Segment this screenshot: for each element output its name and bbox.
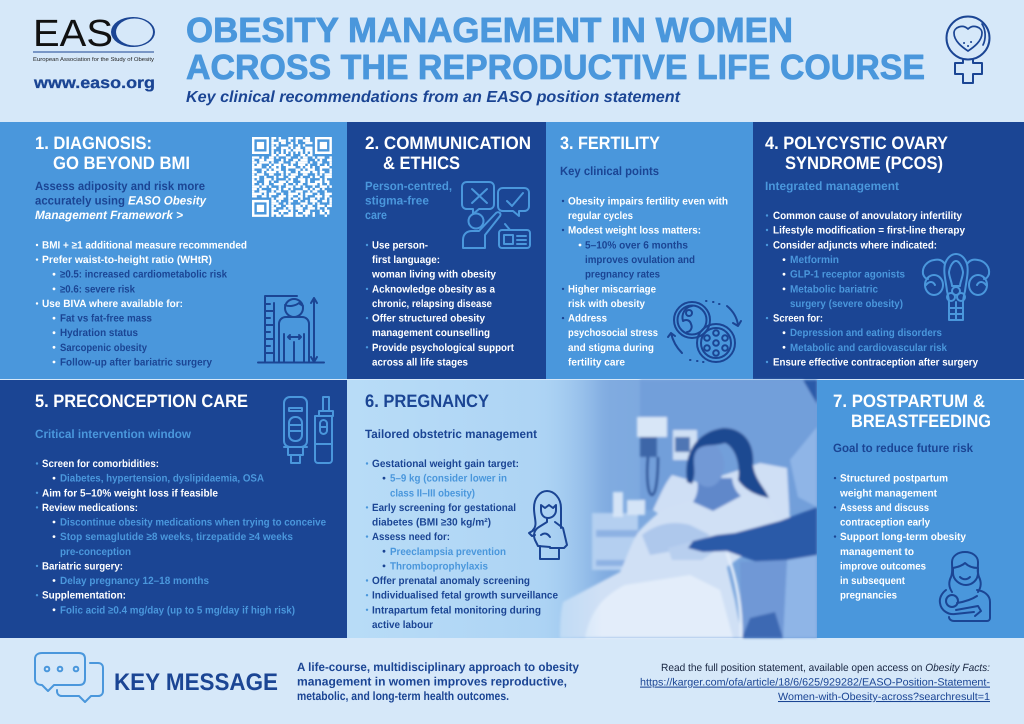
heading: 5. PRECONCEPTION CARE — [35, 391, 248, 411]
reference link: Women-with-Obesity-across?searchresult=1 — [778, 691, 990, 703]
list — [366, 240, 514, 368]
reference link: https://karger.com/ofa/article/18/6/625/929282/EASO-Position-Statement- — [640, 677, 991, 689]
list: Sarcopenic obesity — [60, 342, 147, 354]
list: woman living with obesity — [371, 269, 496, 281]
list: Fat vs fat-free mass — [60, 312, 152, 324]
icon: pregnant woman — [529, 491, 567, 559]
list: Thromboprophylaxis — [390, 560, 488, 572]
EASO logo — [33, 13, 155, 63]
icon: speech bubbles with person — [462, 182, 530, 248]
intro text: Integrated management — [765, 179, 899, 193]
intro text: Goal to reduce future risk — [833, 441, 973, 455]
panel 5: preconception care — [0, 380, 347, 638]
intro text: Key clinical points — [560, 164, 659, 178]
list: weight management — [839, 487, 937, 499]
list: Review medications: — [42, 502, 138, 514]
panel 4: PCOS — [753, 122, 1024, 379]
reference link: Read the full position statement, available open access on Obesity Facts: — [661, 662, 990, 674]
heading: 7. POSTPARTUM & — [833, 391, 985, 411]
list: BMI + ≥1 additional measure recommended — [42, 240, 247, 252]
list: class II–III obesity) — [390, 487, 475, 499]
panel 7: postpartum and breastfeeding — [817, 380, 1024, 638]
list — [766, 210, 978, 368]
title — [186, 11, 925, 87]
heading — [35, 133, 190, 173]
list: management counselling — [372, 327, 490, 339]
QR code — [252, 138, 332, 216]
subtitle: Key clinical recommendations from an EASO position statement — [186, 89, 681, 106]
list: Assess and discuss — [840, 502, 929, 514]
heading — [365, 133, 531, 173]
intro text: Critical intervention window — [35, 427, 192, 441]
heading — [765, 133, 948, 173]
EASO logo: EAS — [33, 13, 113, 55]
list: Metabolic and cardiovascular risk — [790, 342, 947, 354]
list: Preeclampsia prevention — [390, 546, 506, 558]
list: GLP-1 receptor agonists — [790, 269, 905, 281]
list: Diabetes, hypertension, dyslipidaemia, OSA — [60, 473, 264, 485]
intro text: Management Framework > — [35, 208, 183, 222]
heading: 3. FERTILITY — [560, 133, 660, 153]
list: active labour — [372, 619, 433, 631]
list: Delay pregnancy 12–18 months — [60, 575, 209, 587]
title: OBESITY MANAGEMENT IN WOMEN — [186, 11, 793, 50]
list: Screen for: — [773, 312, 823, 324]
list — [834, 473, 966, 602]
list: management to — [840, 546, 914, 558]
list: Depression and eating disorders — [790, 327, 942, 339]
list: Hydration status — [60, 327, 138, 339]
list: Metformin — [790, 254, 839, 266]
list: 5–10% over 6 months — [585, 240, 688, 252]
list: Prefer waist-to-height ratio (WHtR) — [42, 254, 212, 266]
intro text: Assess adiposity and risk more — [35, 179, 205, 193]
intro text — [365, 179, 452, 222]
list: Acknowledge obesity as a — [372, 283, 495, 295]
list: risk with obesity — [568, 298, 645, 310]
icon: person with height ruler — [258, 296, 324, 362]
key message label: KEY MESSAGE — [114, 669, 278, 696]
list: regular cycles — [568, 210, 633, 222]
list: Lifestyle modification = first-line therapy — [773, 224, 965, 236]
icon: mother holding baby — [940, 552, 990, 621]
list — [36, 458, 326, 616]
list: and stigma during — [568, 342, 654, 354]
list: ≥0.5: increased cardiometabolic risk — [60, 269, 227, 281]
list: in subsequent — [840, 575, 905, 587]
heading: 1. DIAGNOSIS: — [35, 133, 152, 153]
heading: GO BEYOND BMI — [53, 153, 190, 173]
list: across all life stages — [372, 356, 468, 368]
reference link — [640, 662, 991, 703]
list: Ensure effective contraception after surgery — [773, 356, 978, 368]
EASO logo: European Association for the Study of Obesity — [33, 56, 154, 63]
photo: patient with clinician — [560, 380, 817, 638]
intro text: Person-centred, — [365, 179, 452, 193]
list: Use person- — [372, 240, 428, 252]
key message text: metabolic, and long-term health outcomes. — [297, 689, 509, 703]
list: Structured postpartum — [840, 473, 948, 485]
title: ACROSS THE REPRODUCTIVE LIFE COURSE — [186, 48, 925, 87]
icon: female symbol with heart — [946, 16, 990, 83]
heading: 4. POLYCYSTIC OVARY — [765, 133, 948, 153]
list: Support long-term obesity — [840, 531, 966, 543]
panel 6: pregnancy — [347, 380, 817, 638]
list: psychosocial stress — [568, 327, 658, 339]
header — [33, 11, 989, 106]
heading: 2. COMMUNICATION — [365, 133, 531, 153]
heading: BREASTFEEDING — [851, 411, 991, 431]
list: Common cause of anovulatory infertility — [773, 210, 962, 222]
list: improve outcomes — [840, 560, 926, 572]
list: Individualised fetal growth surveillance — [372, 590, 558, 602]
list: Obesity impairs fertility even with — [568, 196, 728, 208]
intro text: Tailored obstetric management — [365, 427, 537, 441]
list: contraception early — [840, 516, 930, 528]
website: www.easo.org — [33, 75, 155, 92]
list: first language: — [372, 254, 440, 266]
list: Gestational weight gain target: — [372, 458, 519, 470]
heading: 6. PREGNANCY — [365, 391, 489, 411]
panel 1: diagnosis — [0, 122, 347, 379]
list: fertility care — [568, 356, 625, 368]
list: Bariatric surgery: — [42, 560, 123, 572]
list: Discontinue obesity medications when trying to conceive — [60, 516, 326, 528]
list — [562, 196, 728, 368]
panel 2: communication and ethics — [347, 122, 546, 379]
intro text: accurately using — [35, 194, 125, 208]
list: pre-conception — [60, 546, 131, 558]
list: Aim for 5–10% weight loss if feasible — [42, 487, 218, 499]
list: Assess need for: — [372, 531, 450, 543]
key message text — [297, 660, 579, 703]
list: Folic acid ≥0.4 mg/day (up to 5 mg/day if high risk) — [60, 604, 295, 616]
list: Higher miscarriage — [568, 283, 656, 295]
list: Stop semaglutide ≥8 weeks, tirzepatide ≥4 weeks — [60, 531, 293, 543]
heading: & ETHICS — [383, 153, 460, 173]
list: pregnancies — [840, 590, 897, 602]
list: Intrapartum fetal monitoring during — [372, 604, 541, 616]
icon: uterus — [923, 254, 989, 320]
list: Offer prenatal anomaly screening — [372, 575, 530, 587]
list: Provide psychological support — [372, 342, 514, 354]
list: Early screening for gestational — [372, 502, 516, 514]
heading — [833, 391, 991, 431]
intro text — [35, 179, 207, 222]
footer — [35, 653, 991, 703]
intro text: care — [365, 208, 387, 222]
panel 3: fertility — [546, 122, 753, 379]
list: pregnancy rates — [585, 269, 660, 281]
list: Address — [568, 312, 607, 324]
list — [36, 240, 247, 368]
icon: chat bubbles — [35, 653, 103, 702]
intro text: stigma-free — [365, 194, 429, 208]
intro text: EASO Obesity — [128, 194, 207, 208]
list — [366, 458, 558, 631]
list: Offer structured obesity — [372, 312, 485, 324]
list: surgery (severe obesity) — [790, 298, 903, 310]
list: ≥0.6: severe risk — [60, 283, 135, 295]
list: Follow-up after bariatric surgery — [60, 356, 212, 368]
list: Screen for comorbidities: — [42, 458, 159, 470]
heading: SYNDROME (PCOS) — [785, 153, 943, 173]
list: chronic, relapsing disease — [372, 298, 492, 310]
key message text: A life-course, multidisciplinary approach to obesity — [297, 660, 579, 674]
list: 5–9 kg (consider lower in — [390, 473, 507, 485]
icon: injection pens — [284, 397, 333, 463]
list: Supplementation: — [42, 590, 126, 602]
list: Use BIVA where available for: — [42, 298, 183, 310]
list: Metabolic bariatric — [790, 283, 878, 295]
key message text: management in women improves reproductive, — [297, 675, 567, 689]
list: improves ovulation and — [585, 254, 695, 266]
list: Consider adjuncts where indicated: — [773, 240, 937, 252]
list: Modest weight loss matters: — [568, 224, 701, 236]
icon: egg and embryo cells with cycle arrows — [668, 301, 741, 362]
list: diabetes (BMI ≥30 kg/m²) — [372, 516, 491, 528]
